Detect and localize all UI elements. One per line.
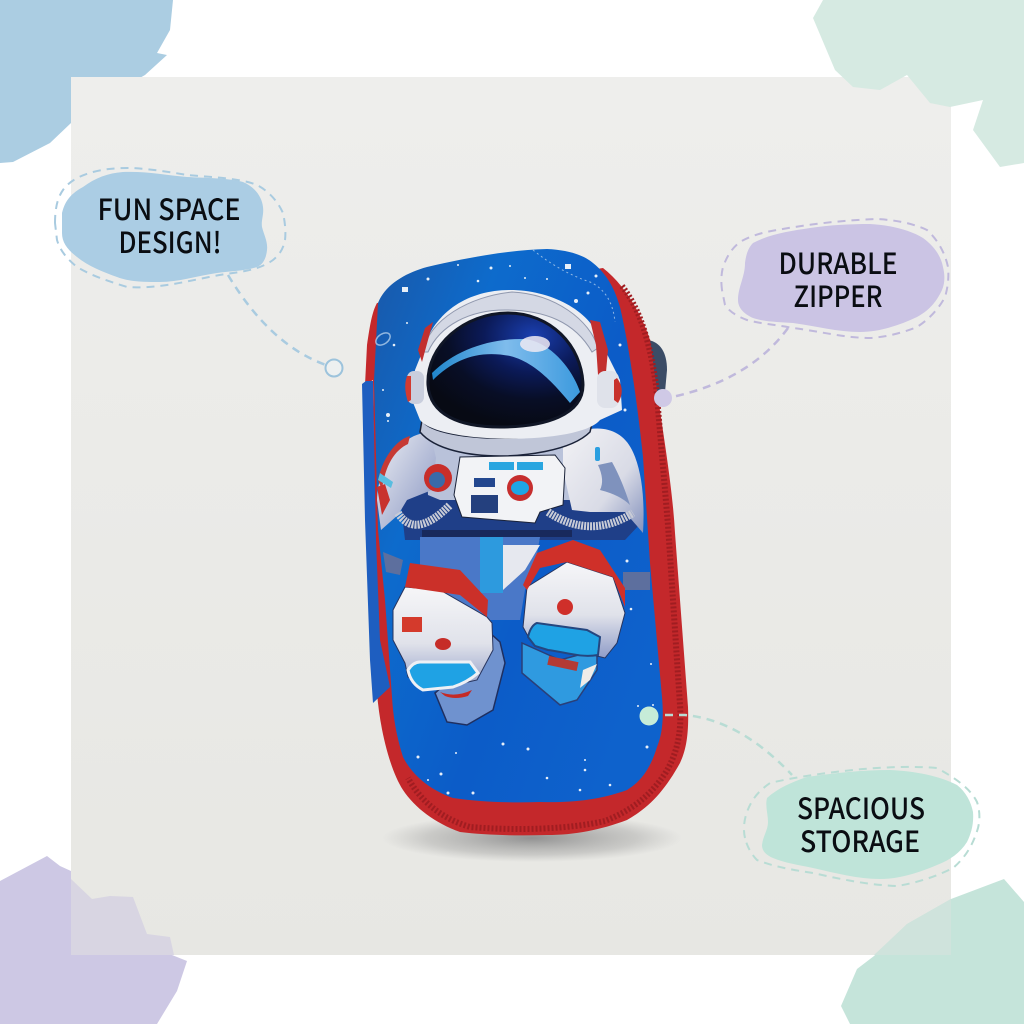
- zipper edge: [365, 268, 688, 835]
- side strap: [362, 381, 390, 703]
- visor sun flare: [520, 336, 550, 352]
- astronaut red shoulder valve: [424, 464, 452, 492]
- astronaut left arm: [377, 432, 436, 530]
- brush corner: green top right: [813, 0, 1024, 167]
- handle behind case: [648, 340, 667, 392]
- stars: [382, 264, 654, 794]
- chest control panel: [454, 455, 565, 523]
- astronaut hips: [420, 537, 540, 625]
- pencil case: [362, 249, 688, 835]
- callout: spacious storage: [744, 767, 979, 886]
- left lower boot: [435, 633, 505, 725]
- visor planet glow: [432, 339, 580, 403]
- callout: fun space design: [55, 168, 285, 287]
- callout: fun space design: FUN SPACE: [98, 187, 240, 229]
- case front: [374, 249, 663, 802]
- astronaut visor: [428, 313, 583, 427]
- connector: spacious storage: [640, 706, 792, 775]
- connector: fun space design: [228, 275, 342, 376]
- right lower boot: [522, 643, 597, 705]
- side tethers: [383, 552, 650, 590]
- helmet brow: [423, 292, 598, 352]
- astronaut neck ring: [420, 415, 594, 456]
- brush corner: purple bottom left: [0, 856, 187, 1024]
- suit hoses: [398, 505, 633, 526]
- callout: durable zipper: [721, 219, 948, 338]
- astronaut torso: [425, 438, 595, 500]
- callout: durable zipper: DURABLE: [778, 241, 898, 283]
- right knee: [523, 540, 625, 688]
- left earpiece: [405, 371, 424, 404]
- ringed planet and constellation: [374, 250, 615, 348]
- zipper teeth: [408, 286, 680, 829]
- photo panel: [71, 77, 951, 955]
- connector: durable zipper: [654, 328, 788, 407]
- astronaut backdrop dark suit area: [400, 485, 640, 540]
- helmet red strip: [590, 320, 608, 375]
- callout: spacious storage: STORAGE: [800, 819, 920, 861]
- brush overlap: purple on panel: [71, 879, 174, 955]
- callout: spacious storage: SPACIOUS: [797, 786, 925, 828]
- brush corner: green bottom right: [841, 879, 1024, 1024]
- astronaut right arm: [563, 429, 644, 533]
- callout: fun space design: DESIGN!: [118, 220, 222, 262]
- left knee: [393, 563, 493, 698]
- belt: [422, 530, 572, 537]
- astronaut helmet shell: [412, 290, 622, 439]
- brush corner: blue top left: [0, 0, 173, 163]
- callout: durable zipper: ZIPPER: [794, 274, 882, 316]
- brush overlap: green on panel: [874, 899, 951, 955]
- case shadow: [382, 814, 682, 862]
- right earpiece: [597, 371, 622, 408]
